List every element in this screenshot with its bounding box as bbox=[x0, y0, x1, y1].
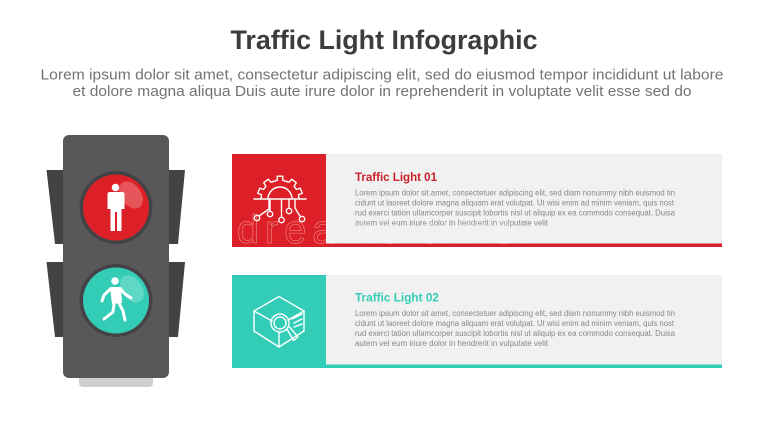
body text: cidunt ut laoreet dolore magna aliquam erat volutpat. Ut wisi enim ad minim veniam, quis nost bbox=[355, 198, 675, 208]
body text: cidunt ut laoreet dolore magna aliquam erat volutpat. Ut wisi enim ad minim veniam, quis nost bbox=[355, 319, 675, 328]
heading: Traffic Light 02 bbox=[355, 292, 439, 304]
traffic light bbox=[46, 135, 185, 387]
body text: rud exerci tation ullamcorper suscipit lobortis nisl ut aliquip ex ea commodo consequat. Duisa bbox=[355, 208, 676, 218]
colour block bbox=[232, 275, 326, 368]
accent bar bbox=[232, 244, 722, 247]
body text bbox=[355, 188, 676, 228]
icon: walking person bbox=[102, 277, 131, 320]
panel: traffic light 01 bbox=[232, 154, 722, 247]
heading: Traffic Light 01 bbox=[355, 172, 438, 184]
icon: gear circuit bbox=[254, 176, 306, 223]
body text: Lorem ipsum dolor sit amet, consectetuer adipiscing elit, sed diam nonummy nibh euismod tin bbox=[355, 188, 675, 198]
housing bbox=[63, 135, 169, 378]
body text: Lorem ipsum dolor sit amet, consectetuer adipiscing elit, sed diam nonummy nibh euismod tin bbox=[355, 309, 675, 318]
green light bbox=[80, 264, 152, 337]
red light bbox=[80, 171, 152, 244]
panel: traffic light 02 bbox=[232, 275, 722, 368]
side flaps bbox=[46, 170, 185, 337]
subtitle text: Lorem ipsum dolor sit amet, consectetur adipiscing elit, sed do eiusmod tempor incididunt ut labore bbox=[40, 68, 724, 84]
icon: box with magnifier bbox=[254, 296, 304, 347]
subtitle text: et dolore magna aliqua Duis aute irure dolor in reprehenderit in voluptate velit esse sed do bbox=[72, 84, 692, 100]
body text: rud exerci tation ullamcorper suscipit lobortis nisl ut aliquip ex ea commodo consequat. Duisa bbox=[355, 329, 676, 338]
subtitle text bbox=[40, 68, 724, 100]
title: Traffic Light Infographic bbox=[230, 25, 538, 55]
accent bar bbox=[232, 364, 722, 368]
icon: standing person bbox=[108, 184, 124, 231]
watermark: dreams time. bbox=[237, 208, 532, 252]
base shadow bbox=[79, 370, 153, 387]
body text bbox=[355, 309, 676, 348]
colour block bbox=[232, 154, 326, 247]
body text: autem vel eum iriure dolor in hendrerit in vulputate velit bbox=[355, 339, 549, 348]
panel background bbox=[232, 275, 722, 368]
panel background bbox=[232, 154, 722, 247]
body text: autem vel eum iriure dolor in hendrerit in vulputate velit bbox=[355, 218, 549, 228]
